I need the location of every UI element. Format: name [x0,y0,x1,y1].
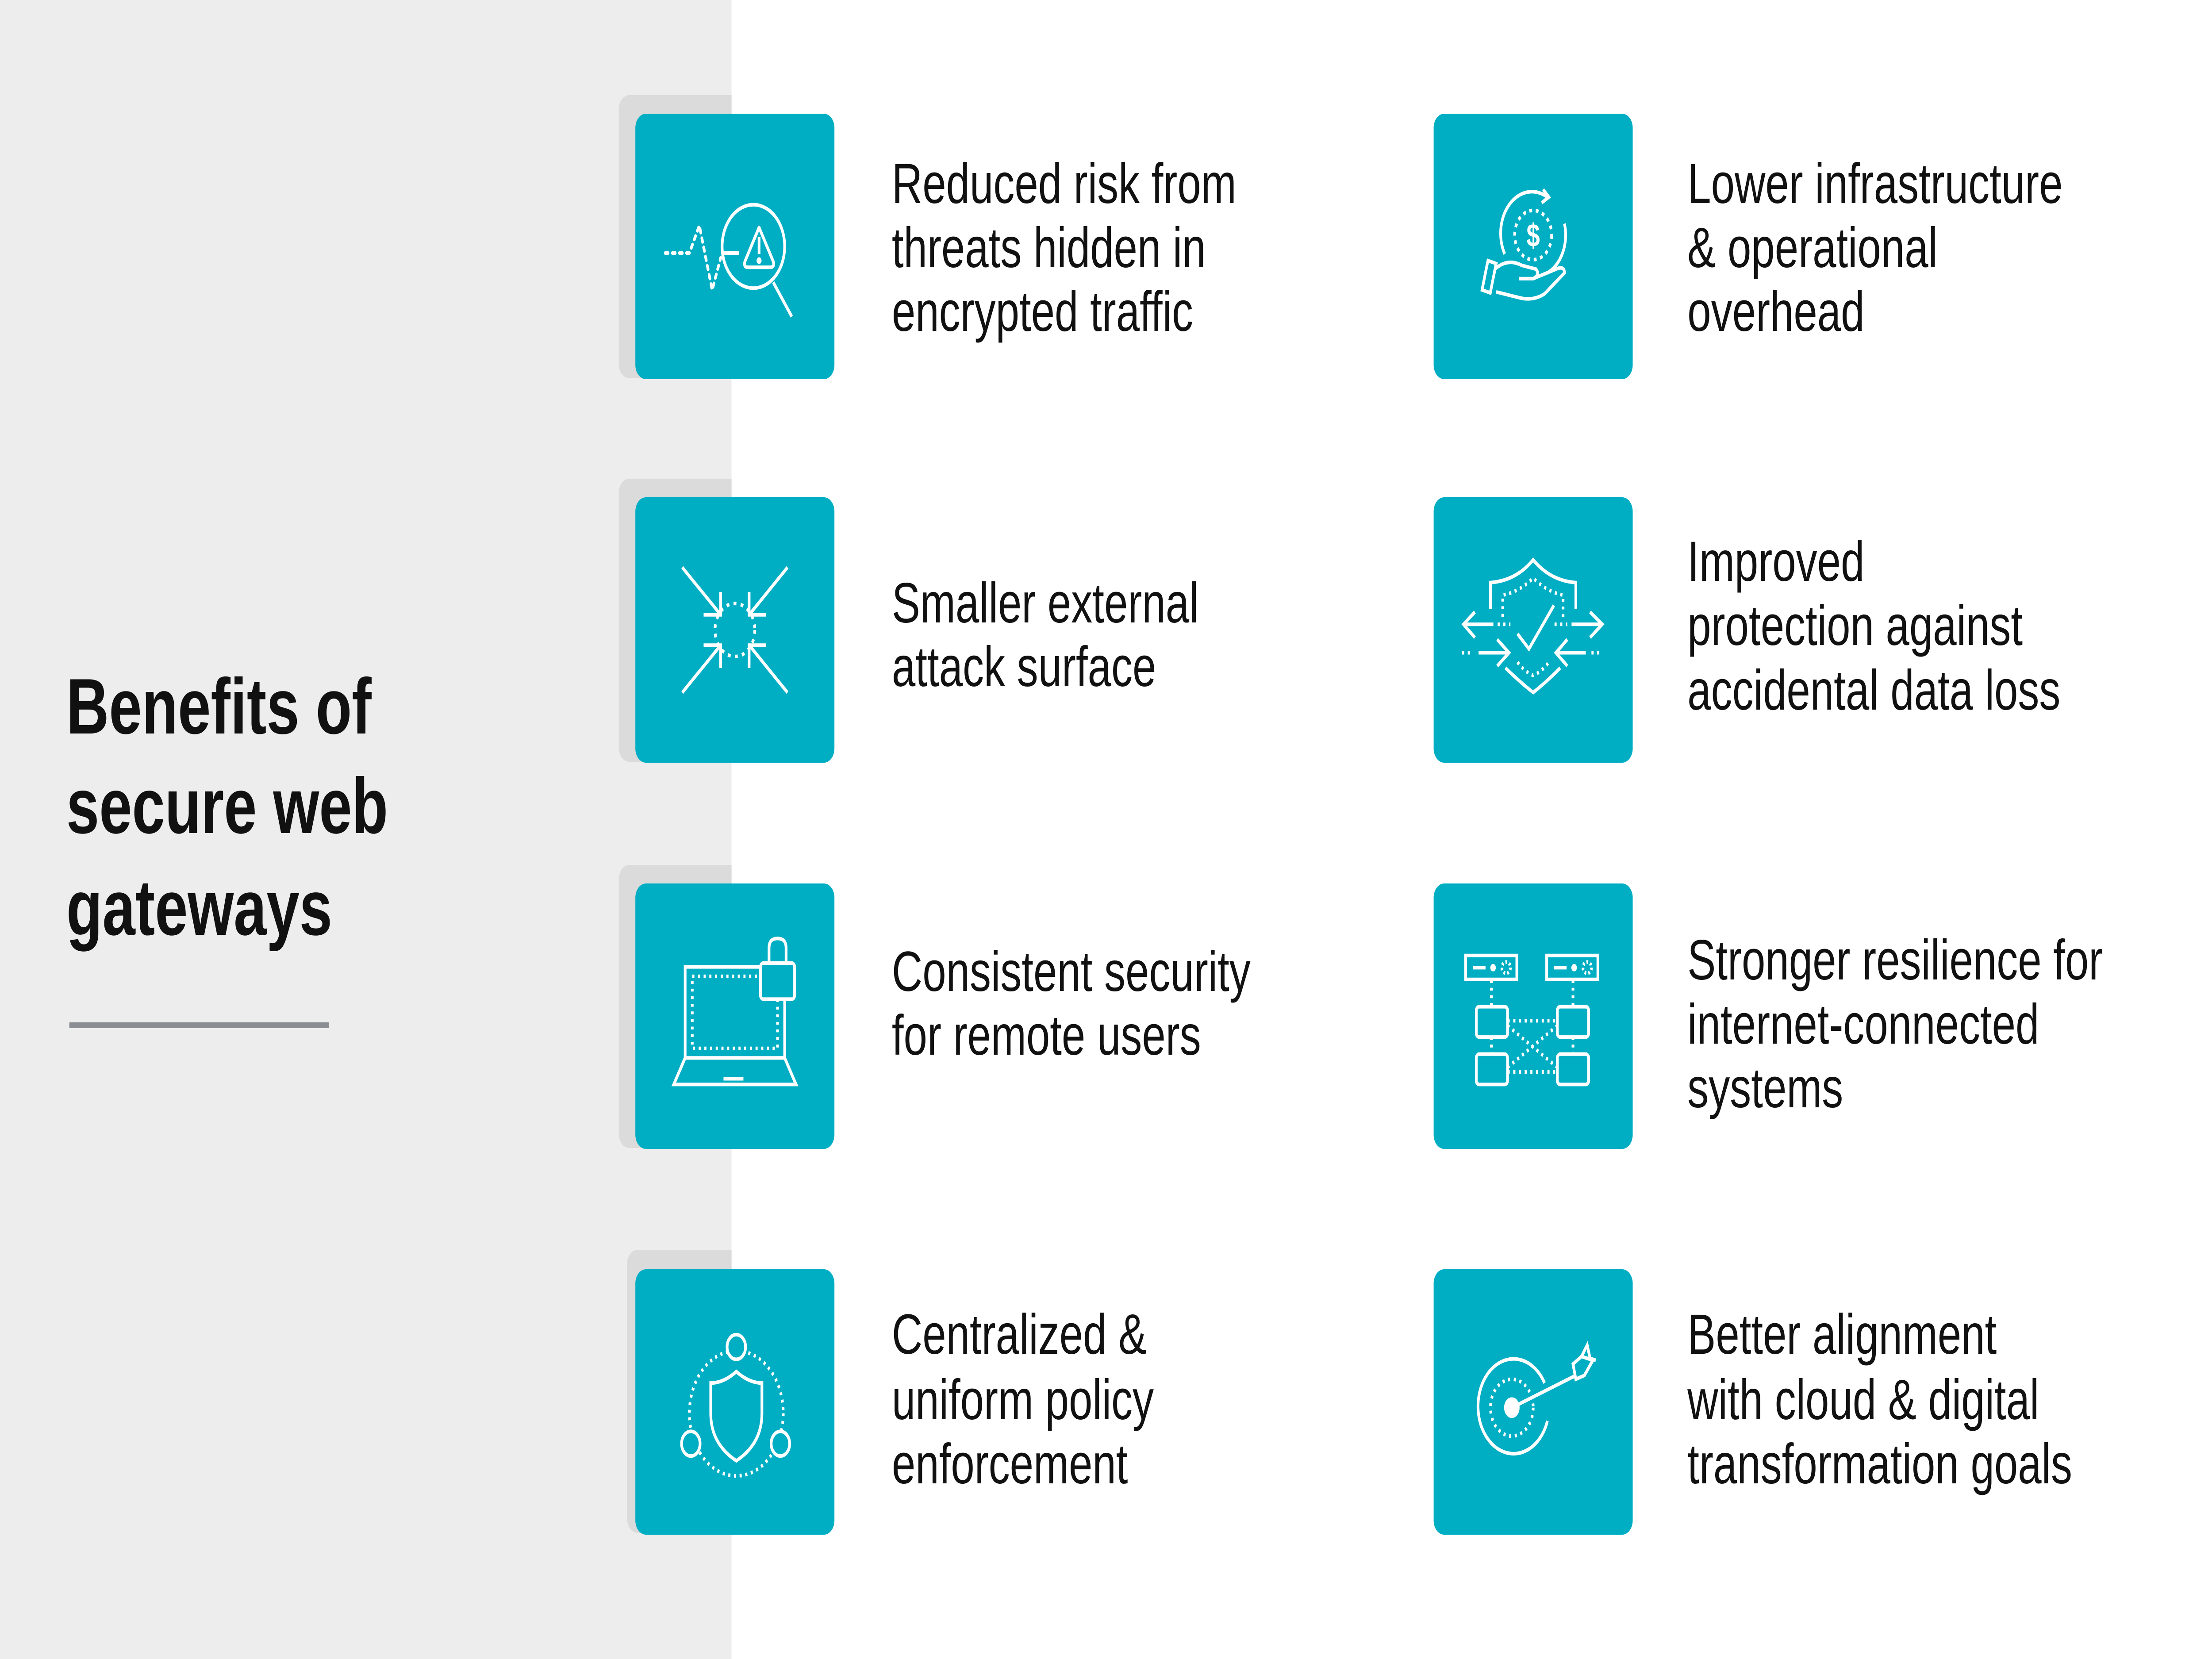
icon box: encrypted traffic threats [635,114,834,379]
title: Benefits of [66,663,372,750]
icon box: smaller attack surface [635,497,834,763]
text: better alignment: transformation goals [1687,1432,2072,1495]
text: centralized policy: Centralized & [892,1303,1147,1366]
title: gateways [66,864,332,952]
icon box: data loss protection [1434,497,1633,763]
icon box: lower overhead [1434,114,1633,379]
icon box: centralized policy [635,1269,834,1535]
text: consistent security [892,940,1251,1067]
text: improved protection: accidental data loss [1687,659,2060,722]
text: improved protection [1687,530,2060,722]
title: secure web [66,762,388,850]
text: centralized policy: enforcement [892,1432,1128,1495]
text: consistent security: for remote users [892,1004,1201,1067]
icon box: lower overhead: $ [1526,217,1540,253]
text: better alignment: with cloud & digital [1687,1368,2039,1431]
text: lower overhead [1687,152,2063,343]
title underline [69,1022,329,1028]
text: reduced risk: encrypted traffic [892,280,1193,343]
icon box: cloud alignment target [1434,1269,1633,1535]
text: improved protection: protection against [1687,594,2023,657]
text: lower overhead: overhead [1687,280,1865,343]
icon box: resilience network [1434,883,1633,1149]
title [66,663,388,952]
text: reduced risk: Reduced risk from [892,152,1237,215]
text: smaller attack surface: Smaller external [892,572,1198,634]
text: consistent security: Consistent security [892,940,1251,1003]
text: reduced risk: threats hidden in [892,216,1206,279]
text: stronger resilience: systems [1687,1056,1843,1119]
text: lower overhead: Lower infrastructure [1687,152,2063,215]
text: better alignment: Better alignment [1687,1303,1997,1366]
text: stronger resilience [1687,929,2103,1119]
text: better alignment [1687,1303,2072,1495]
text: improved protection: Improved [1687,530,1864,593]
text: centralized policy [892,1303,1154,1495]
text: smaller attack surface [892,572,1198,698]
text: smaller attack surface: attack surface [892,635,1156,698]
icon box: remote users laptop [635,883,834,1149]
text: centralized policy: uniform policy [892,1368,1154,1431]
text: stronger resilience: Stronger resilience for [1687,929,2103,991]
text: stronger resilience: internet-connected [1687,993,2039,1056]
text: lower overhead: & operational [1687,216,1938,279]
text: reduced risk [892,152,1237,343]
